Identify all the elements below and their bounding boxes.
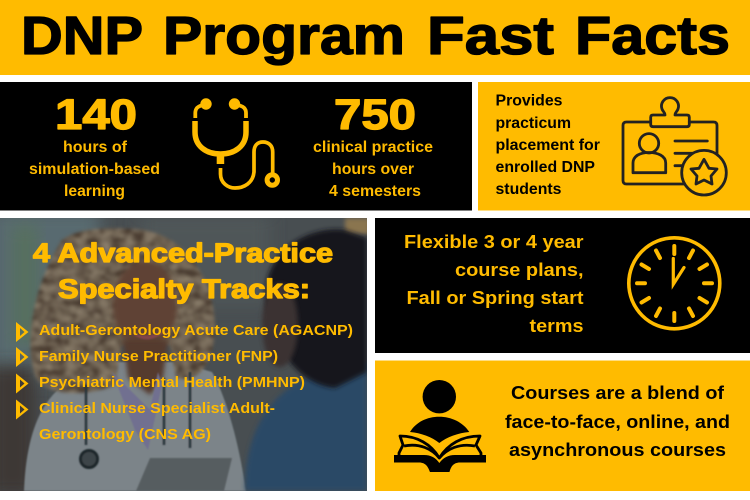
course delivery text: face-to-face, online, and [505, 411, 730, 432]
icon: bullet triangle 1 [16, 322, 28, 342]
practicum text: Provides [496, 92, 562, 110]
title: Facts [575, 7, 730, 66]
stat: 140 hours of simulation-based learning: 140 [55, 91, 137, 139]
stat: 750 clinical practice hours: 750 [334, 91, 416, 139]
course plan text: Flexible 3 or 4 year [404, 231, 584, 252]
track 4: Gerontology (CNS AG) [39, 426, 211, 443]
stat: 750 clinical practice hours: 4 semesters [329, 183, 421, 200]
panel: course delivery [375, 360, 750, 491]
title banner [0, 0, 750, 75]
title: Program [163, 7, 405, 66]
course delivery text: asynchronous courses [509, 439, 726, 460]
course delivery text [505, 382, 730, 460]
track 2: Family Nurse Practitioner (FNP) [39, 348, 278, 365]
stat: 140 hours of simulation-based learning: simulation-based [29, 161, 160, 178]
practicum text [496, 92, 600, 198]
icon: bullet triangle 3 [16, 374, 28, 394]
course plan text [404, 231, 584, 336]
course plan text: Fall or Spring start [406, 287, 584, 308]
track 4 [39, 400, 275, 443]
stat: 140 hours of simulation-based learning: hours of [63, 139, 128, 156]
practicum text: practicum [496, 115, 571, 132]
practicum text: placement for [496, 137, 600, 154]
photo: blurred nurse with patient [0, 210, 370, 495]
icon: stethoscope [195, 98, 277, 188]
icon: bullet triangle 2 [16, 347, 28, 367]
heading: specialty tracks: Specialty Tracks: [58, 274, 310, 304]
title: DNP [21, 7, 143, 66]
icon: clock [629, 238, 720, 329]
title [21, 7, 730, 66]
stat: 140 hours of simulation-based learning [29, 91, 160, 200]
stat: 750 clinical practice hours: hours over [332, 161, 414, 178]
track 3: Psychiatric Mental Health (PMHNP) [39, 374, 305, 391]
panel: simulation and clinical hours [0, 82, 472, 210]
title: Fast [427, 7, 554, 66]
heading: specialty tracks [33, 238, 333, 304]
icon: ID badge with star [623, 98, 726, 195]
track 4: Clinical Nurse Specialist Adult- [39, 400, 275, 417]
panel: practicum placement [478, 82, 750, 210]
stat: 140 hours of simulation-based learning: learning [64, 183, 125, 200]
icon: person reading a book [394, 380, 486, 472]
list: four specialty tracks [16, 322, 353, 443]
track 1: Adult-Gerontology Acute Care (AGACNP) [39, 322, 353, 339]
stat: 750 clinical practice hours [313, 91, 433, 200]
course plan text: course plans, [455, 259, 584, 280]
practicum text: enrolled DNP [496, 159, 595, 176]
course delivery text: Courses are a blend of [511, 382, 725, 403]
heading: specialty tracks: 4 Advanced-Practice [33, 238, 333, 268]
icon: bullet triangle 4 [16, 400, 28, 420]
stat: 750 clinical practice hours: clinical practice [313, 139, 433, 156]
panel: flexible course plans [375, 218, 750, 353]
course plan text: terms [530, 315, 584, 336]
practicum text: students [496, 181, 562, 198]
panel: photo with specialty tracks [0, 210, 370, 495]
